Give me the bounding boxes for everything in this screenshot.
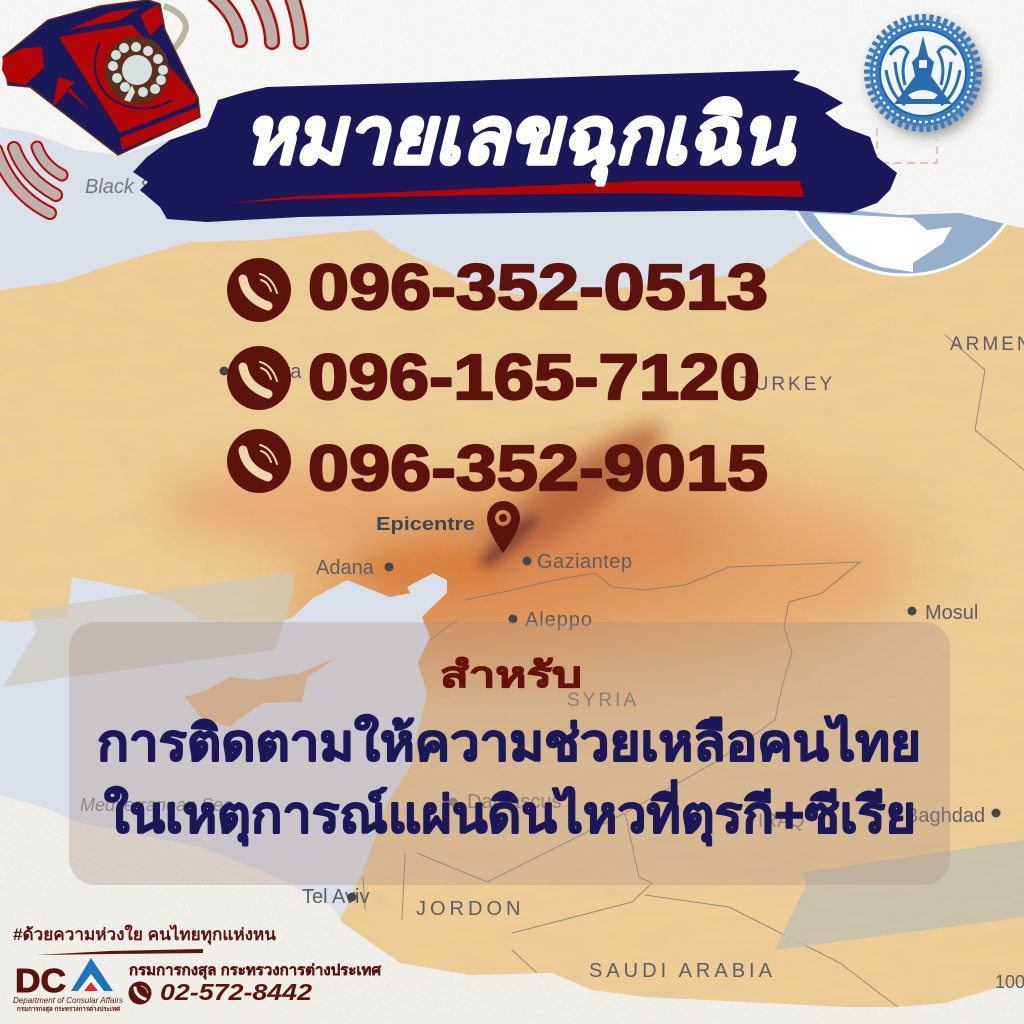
Cyprus [185, 657, 338, 727]
footer hashtag: #ด้วยความห่วงใย คนไทยทุกแห่งหน [13, 924, 277, 945]
map labels: Black Sea [85, 176, 175, 198]
map labels: IRAQ [758, 811, 804, 832]
ministry seal [867, 17, 979, 129]
borders [363, 335, 1024, 1008]
logo triangle [71, 958, 113, 991]
phone icon [227, 429, 291, 493]
heading brush background [133, 70, 897, 222]
map labels: SAUDI ARABIA [589, 960, 776, 982]
icon: red rotary telephone [2, 0, 200, 155]
map labels: TURKEY [740, 374, 835, 395]
map labels: JORDON [416, 898, 524, 920]
footer phone icon [128, 982, 152, 1004]
map labels: Epicentre [376, 514, 475, 534]
footer divider brush [36, 949, 203, 955]
map labels: Aleppo [525, 609, 592, 631]
DCA logo [13, 958, 124, 1013]
icon: epicentre map pin [487, 501, 520, 553]
department name: กรมการกงสุล กระทรวงการต่างประเทศ [129, 962, 381, 980]
map labels [80, 176, 1024, 992]
map labels: Adana [316, 557, 375, 579]
heading red underline [229, 181, 804, 203]
DCA logo: กรมการกงสุล กระทรวงการต่างประเทศ [17, 1005, 120, 1013]
heading: หมายเลขฉุกเฉิน [243, 91, 796, 186]
land [0, 220, 1024, 1024]
body line 1: การติดตามให้ความช่วยเหลือคนไทย [97, 714, 921, 771]
logo letters: DC [15, 962, 66, 999]
globe inset [781, 27, 1024, 275]
phone row 1: 096-352-0513 [308, 251, 768, 323]
sound waves left [0, 147, 62, 213]
sound waves top [210, 0, 301, 42]
map labels: Mediterranean Sea [80, 795, 233, 815]
earthquake intensity heat map [160, 407, 926, 702]
body line 2: ในเหตุการณ์แผ่นดินไหวที่ตุรกี+ซีเรีย [104, 780, 916, 846]
map labels: SYRIA [567, 690, 639, 711]
phone icon [227, 346, 291, 410]
bottom paper [0, 795, 1024, 1024]
phone row 2: 096-165-7120 [308, 341, 760, 413]
phone icon [227, 258, 291, 322]
translucent text panel [69, 622, 950, 885]
map labels: Damascus [467, 791, 561, 813]
for label: สำหรับ [440, 654, 582, 695]
phone row 3: 096-352-9015 [308, 432, 768, 504]
tape: left [3, 572, 293, 687]
map labels: Ankara [238, 361, 302, 383]
map labels: Gaziantep [537, 551, 632, 573]
logo caption: Department of Consular Affairs [13, 995, 124, 1005]
top paper [0, 0, 1024, 228]
map labels: Mosul [925, 602, 978, 624]
map labels: Baghdad [905, 805, 985, 827]
phone numbers [227, 251, 768, 504]
map labels: Tel Aviv [302, 886, 369, 908]
tape: right [775, 840, 1024, 950]
footer phone: 02-572-8442 [160, 979, 312, 1005]
